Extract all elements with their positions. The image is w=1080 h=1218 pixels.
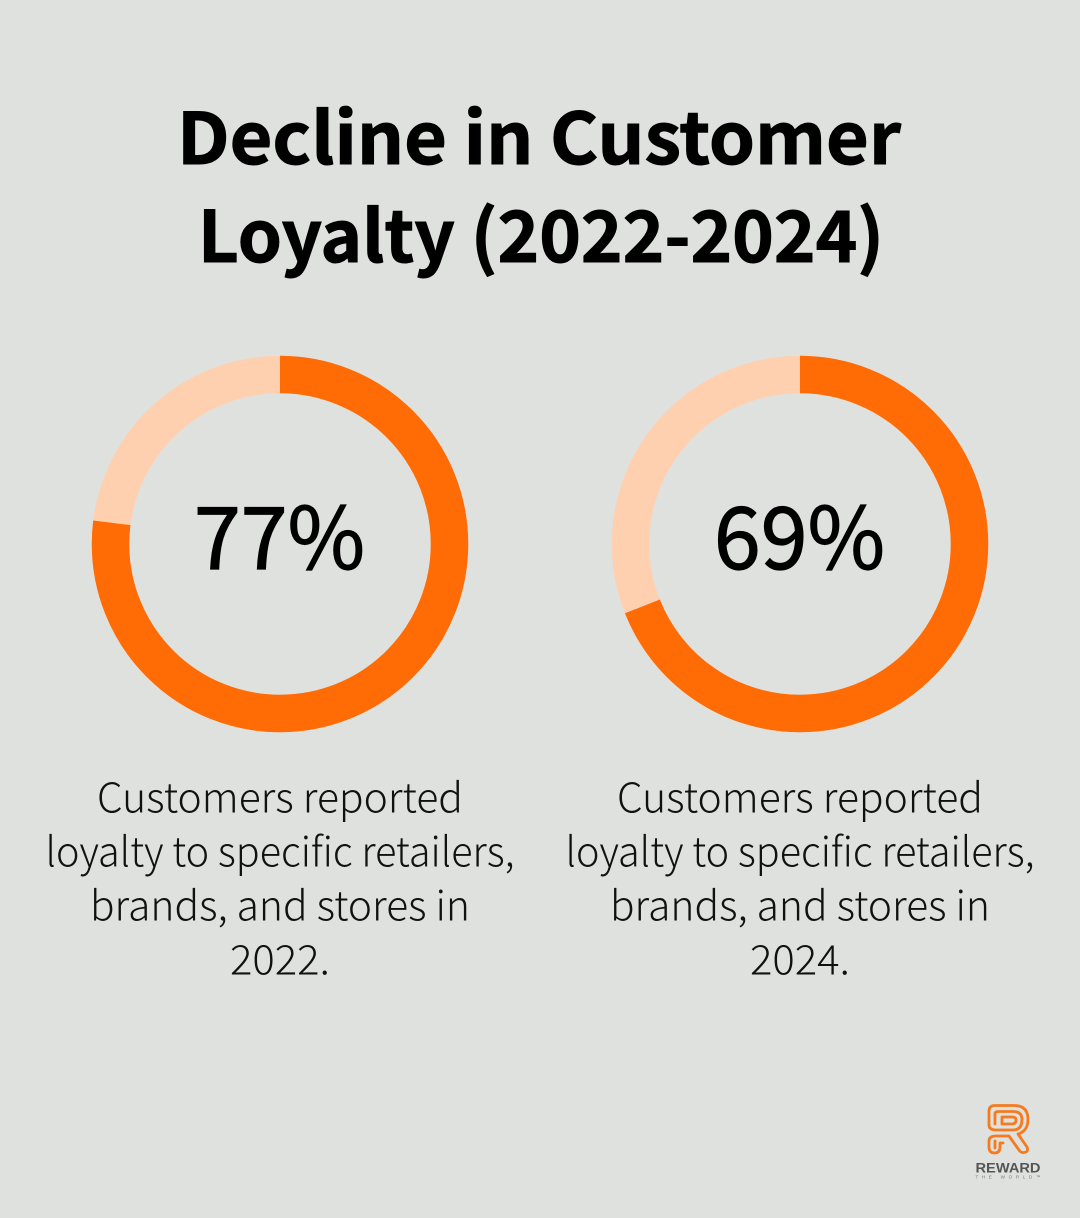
caption: 2022: loyalty to specific retailers,	[46, 818, 514, 878]
donut chart: 77% in 2022	[110, 374, 450, 714]
caption: 2022: Customers reported	[97, 764, 463, 824]
caption: 2024	[566, 764, 1034, 986]
logo: Reward the World	[976, 1106, 1041, 1180]
caption: 2024: loyalty to specific retailers,	[566, 818, 1034, 878]
title	[177, 83, 902, 283]
logo: Reward the World: REWARD	[976, 1160, 1041, 1176]
donut chart: 77% in 2022: 77%	[194, 469, 365, 594]
caption: 2022: 2022.	[230, 926, 330, 986]
donut chart: 69% in 2024: 69%	[714, 469, 885, 594]
caption: 2022	[46, 764, 514, 986]
logo: Reward the World: THE WORLD™	[976, 1174, 1040, 1180]
caption: 2024: 2024.	[750, 926, 850, 986]
caption: 2024: Customers reported	[617, 764, 983, 824]
title: Decline in Customer	[177, 83, 902, 185]
donut chart: 69% in 2024	[630, 374, 970, 714]
caption: 2022: brands, and stores in	[90, 872, 470, 932]
title: Loyalty (2022-2024)	[198, 181, 884, 283]
caption: 2024: brands, and stores in	[610, 872, 990, 932]
